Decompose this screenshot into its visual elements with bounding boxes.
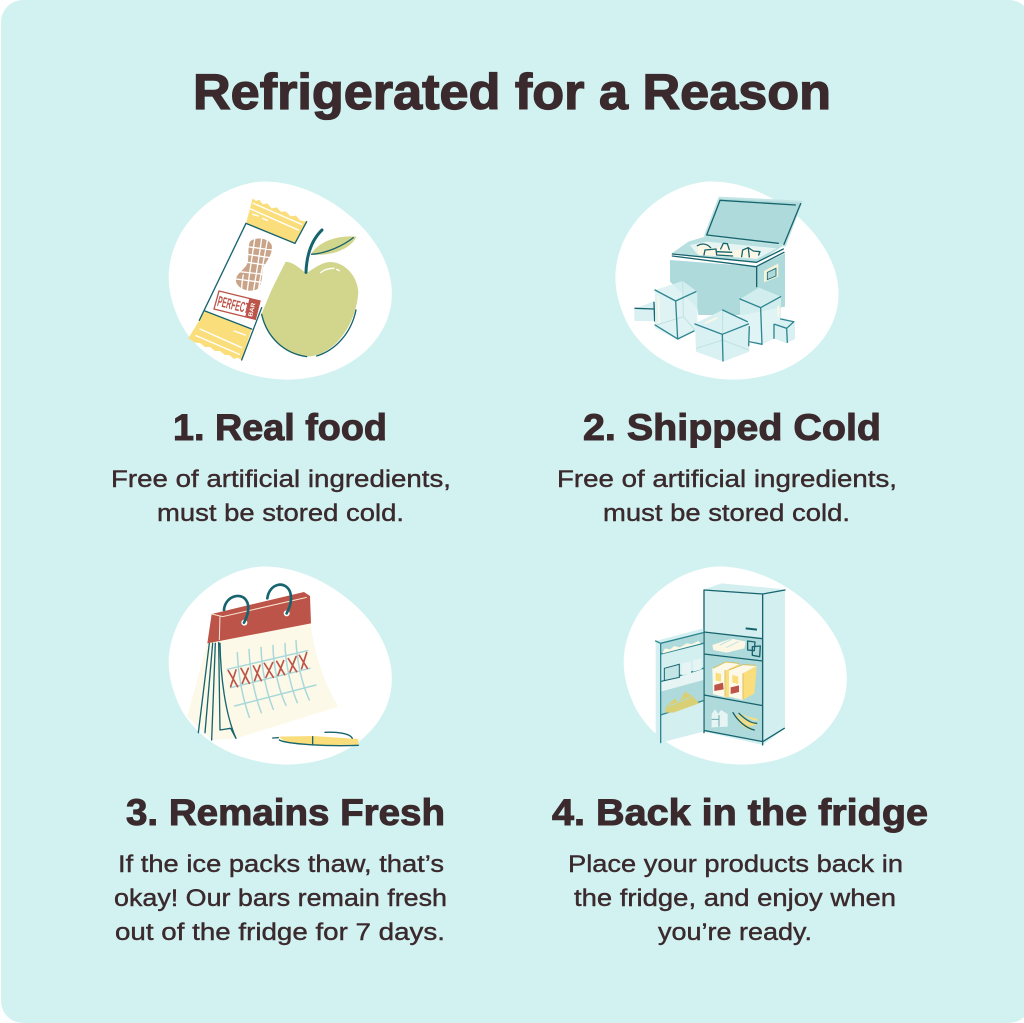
heading: shipped cold: 2. Shipped Cold: [583, 407, 881, 448]
panel: remains fresh: [114, 567, 447, 946]
icon: peanut bar and apple: [169, 182, 392, 380]
text: shipped cold description: Free of artificial ingredients,: [557, 466, 897, 493]
icon: calendar and pen: [169, 567, 392, 765]
panel: back in the fridge: [552, 567, 928, 946]
icon: peanut bar and apple: PERFECT: [216, 294, 251, 317]
heading: back in the fridge: 4. Back in the fridge: [552, 792, 928, 833]
text: remains fresh description: [114, 851, 447, 946]
heading: remains fresh: 3. Remains Fresh: [126, 792, 445, 833]
icon: peanut bar and apple: BAR: [248, 302, 257, 317]
text: shipped cold description: [557, 466, 897, 527]
text: remains fresh description: okay! Our bars remain fresh: [114, 885, 447, 912]
title: Refrigerated for a Reason: [193, 64, 831, 120]
text: remains fresh description: out of the fridge for 7 days.: [115, 919, 445, 946]
text: shipped cold description: must be stored cold.: [603, 500, 850, 527]
text: real food description: [111, 466, 451, 527]
text: back in the fridge description: the fridge, and enjoy when: [574, 885, 896, 912]
heading: real food: 1. Real food: [173, 407, 387, 448]
text: back in the fridge description: Place your products back in: [568, 851, 903, 878]
text: real food description: must be stored cold.: [157, 500, 404, 527]
text: real food description: Free of artificial ingredients,: [111, 466, 451, 493]
text: back in the fridge description: you’re ready.: [658, 919, 812, 946]
text: remains fresh description: If the ice packs thaw, that’s: [118, 851, 444, 878]
icon: open fridge with food: [624, 567, 847, 765]
icon: cooler with ice cubes: [615, 182, 838, 380]
panel: real food: [111, 182, 451, 527]
panel: shipped cold: [557, 182, 897, 527]
text: back in the fridge description: [568, 851, 903, 946]
